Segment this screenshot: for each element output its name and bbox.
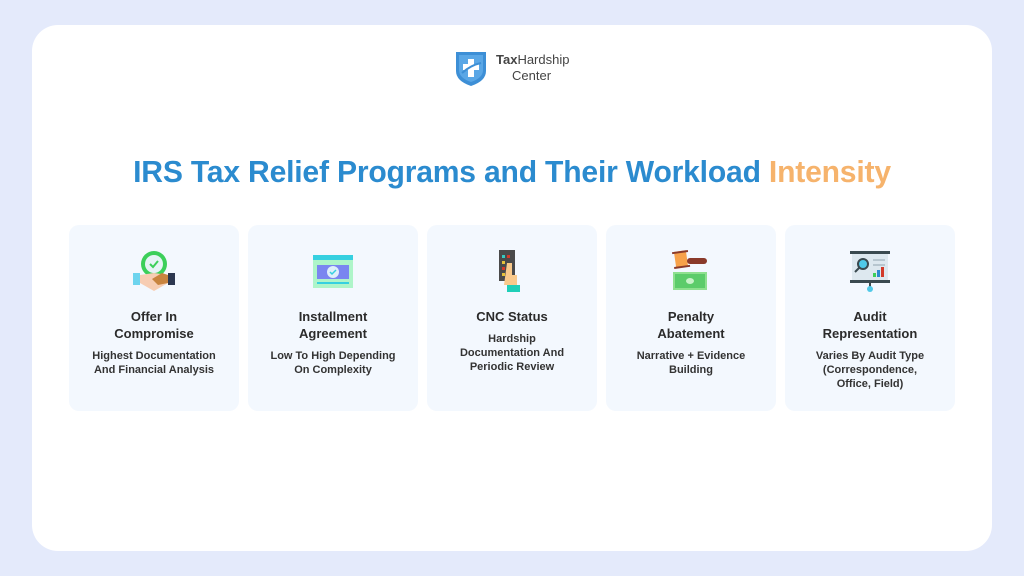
panel: installment agreement: Agreement xyxy=(299,326,367,341)
panel: offer in compromise: Highest Documentation And Financial Analysis xyxy=(92,350,216,376)
panel: CNC status: Documentation And Periodic Review xyxy=(460,347,564,373)
panel: audit representation: Representation xyxy=(823,326,917,341)
icon: phone with hand xyxy=(499,250,520,292)
panel: penalty abatement: Penalty xyxy=(668,309,714,324)
panel: offer in compromise: Compromise xyxy=(114,326,194,341)
panel: penalty abatement: Narrative + Evidence Building xyxy=(637,350,745,376)
panel: audit representation xyxy=(785,225,955,411)
panel: CNC status xyxy=(427,225,597,411)
title: IRS Tax Relief Programs and Their Workload Intensity xyxy=(133,156,891,189)
logo xyxy=(456,52,569,86)
icon: presentation board xyxy=(850,251,890,292)
icon: handshake xyxy=(133,251,175,291)
panel: audit representation: Audit xyxy=(853,309,887,324)
panel: offer in compromise: Offer In xyxy=(131,309,177,324)
panel: installment agreement xyxy=(248,225,418,411)
panel: penalty abatement: Abatement xyxy=(657,326,725,341)
panel: offer in compromise xyxy=(69,225,239,411)
icon: gavel and money xyxy=(672,250,707,290)
panel: CNC status: Hardship xyxy=(488,333,536,345)
panel: CNC status: CNC Status xyxy=(476,309,548,324)
panel: audit representation: Varies By Audit Type (Correspondence, Office, Field) xyxy=(816,350,924,390)
panel: penalty abatement xyxy=(606,225,776,411)
panel: installment agreement: Installment xyxy=(299,309,367,324)
logo: TaxHardship xyxy=(496,52,569,67)
logo: Center xyxy=(512,68,551,83)
panel: installment agreement: Low To High Depending On Complexity xyxy=(270,350,396,376)
icon: agreement screen xyxy=(313,255,353,288)
